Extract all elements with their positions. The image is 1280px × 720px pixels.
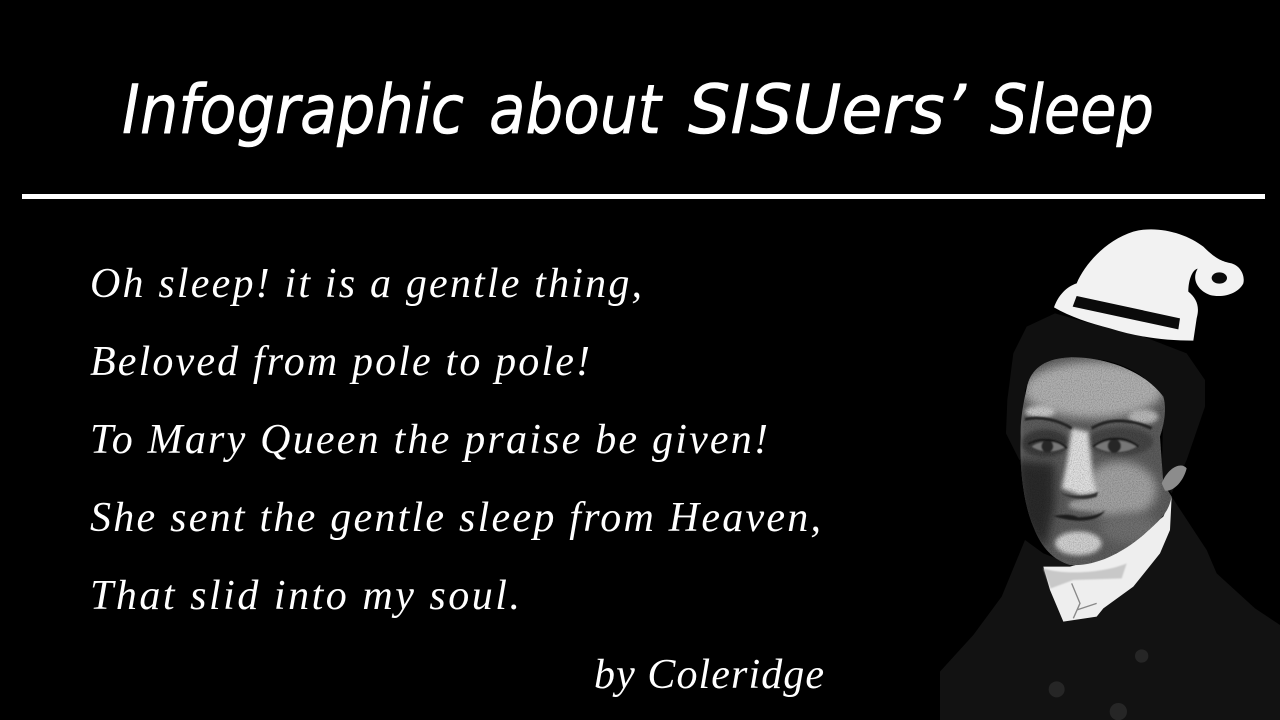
mouth: [1053, 510, 1105, 521]
coat buttons: [1049, 649, 1148, 720]
hat: [1054, 229, 1244, 341]
poem line 1: Oh sleep! it is a gentle thing,: [90, 261, 642, 307]
title: SISUers’: [688, 71, 967, 150]
poem: [90, 261, 821, 619]
nostrils: [1058, 492, 1098, 499]
ear: [1162, 465, 1187, 491]
title: Sleep: [990, 71, 1154, 150]
shirt collar and cravat: [1043, 497, 1172, 622]
poem line 5: That slid into my soul.: [90, 573, 520, 619]
hat band slot: [1073, 296, 1180, 329]
attribution: by Coleridge: [594, 652, 824, 698]
title: about: [489, 71, 663, 150]
eyes: [1025, 418, 1152, 521]
title: Infographic: [122, 71, 464, 150]
left cheek shadow: [1015, 460, 1055, 550]
forehead highlight: [1023, 362, 1163, 418]
face: [1015, 357, 1187, 570]
chin highlight: [1055, 531, 1102, 555]
poem line 4: She sent the gentle sleep from Heaven,: [90, 495, 821, 541]
poem line 3: To Mary Queen the praise be given!: [90, 417, 768, 463]
divider line: [22, 194, 1265, 199]
hair: [1006, 313, 1205, 493]
eye socket shadow: [1022, 429, 1068, 457]
title: [122, 71, 1154, 150]
poem line 2: Beloved from pole to pole!: [90, 339, 590, 385]
nose highlight: [1062, 428, 1097, 495]
coat: [940, 497, 1280, 720]
upper lip: [1068, 499, 1105, 511]
hat pompom hole: [1212, 272, 1227, 284]
portrait of Coleridge wearing a hat: [940, 229, 1280, 720]
right cheek: [1083, 462, 1157, 518]
